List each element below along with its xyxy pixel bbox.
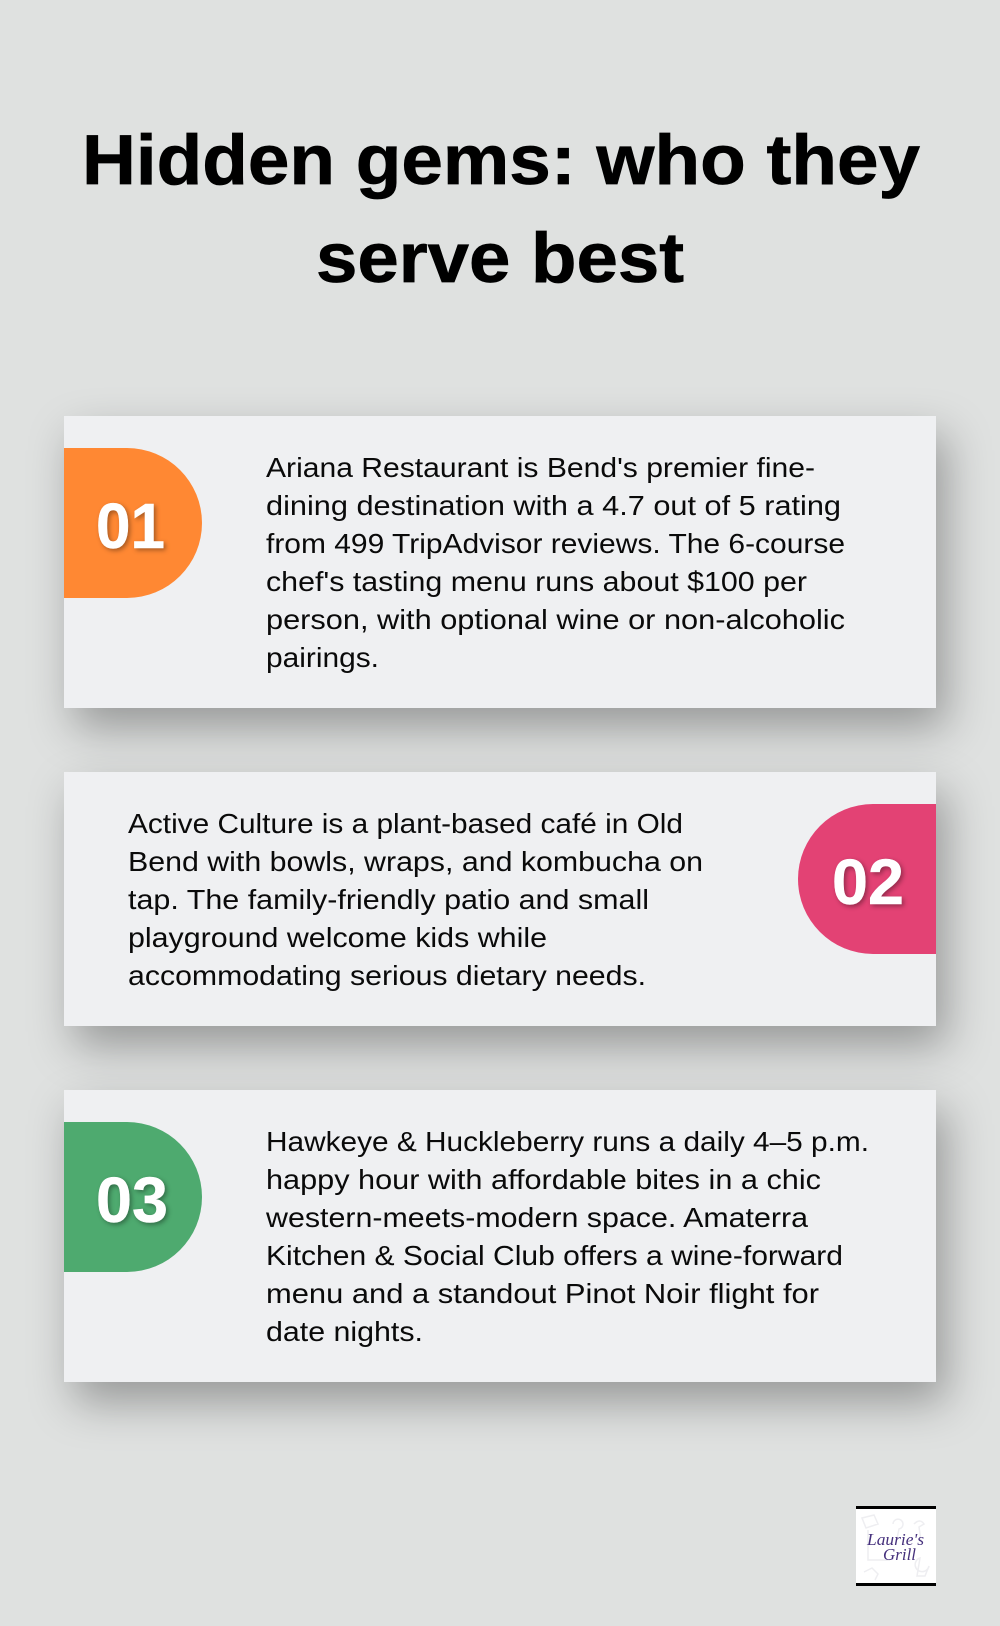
text block: card 2: tap. The family-friendly patio and small [128,884,649,915]
text block: card 1: Ariana Restaurant is Bend's premier fine- [266,452,815,483]
text block: card 3: happy hour with affordable bites in a chic [266,1164,821,1195]
text block: card 3: Kitchen & Social Club offers a wine-forward [266,1240,843,1271]
text block: card 1: person, with optional wine or non-alcoholic [266,604,845,635]
logo: Laurie's Grill: Grill [883,1545,916,1564]
number badge 03 [64,1122,202,1272]
number badge 01 [64,448,202,598]
text block: card 3: Hawkeye & Huckleberry runs a daily 4–5 p.m. [266,1126,869,1157]
text block: card 2 [128,808,703,991]
text block: card 3 [265,1126,869,1347]
text block: card 2: Active Culture is a plant-based café in Old [128,808,683,839]
text block: card 2: Bend with bowls, wraps, and kombucha on [128,846,703,877]
text block: card 1: pairings. [266,642,379,673]
logo: Laurie's Grill [856,1506,936,1586]
text block: card 2: playground welcome kids while [128,922,547,953]
text block: card 1: chef's tasting menu runs about $100 per [266,566,807,597]
title: serve best [316,218,684,297]
title: Hidden gems: who they [82,120,920,199]
number badge 02: 02 [832,846,904,918]
number badge 01: 01 [96,490,165,562]
number badge 03: 03 [96,1164,168,1236]
text block: card 1: from 499 TripAdvisor reviews. The 6-course [266,528,845,559]
text block: card 3: date nights. [266,1316,423,1347]
title [82,120,920,297]
text block: card 3: menu and a standout Pinot Noir flight for [266,1278,819,1309]
text block: card 2: accommodating serious dietary needs. [128,960,646,991]
panel: card 3 Hawkeye and Amaterra [64,1090,936,1382]
panel: card 2 Active Culture [64,772,936,1026]
logo: Laurie's Grill: Laurie's [866,1530,924,1549]
panel: card 1 Ariana Restaurant [64,416,936,708]
number badge 02 [798,804,936,954]
text block: card 1 [266,452,845,673]
text block: card 3: western-meets-modern space. Amaterra [265,1202,808,1233]
text block: card 1: dining destination with a 4.7 out of 5 rating [266,490,841,521]
